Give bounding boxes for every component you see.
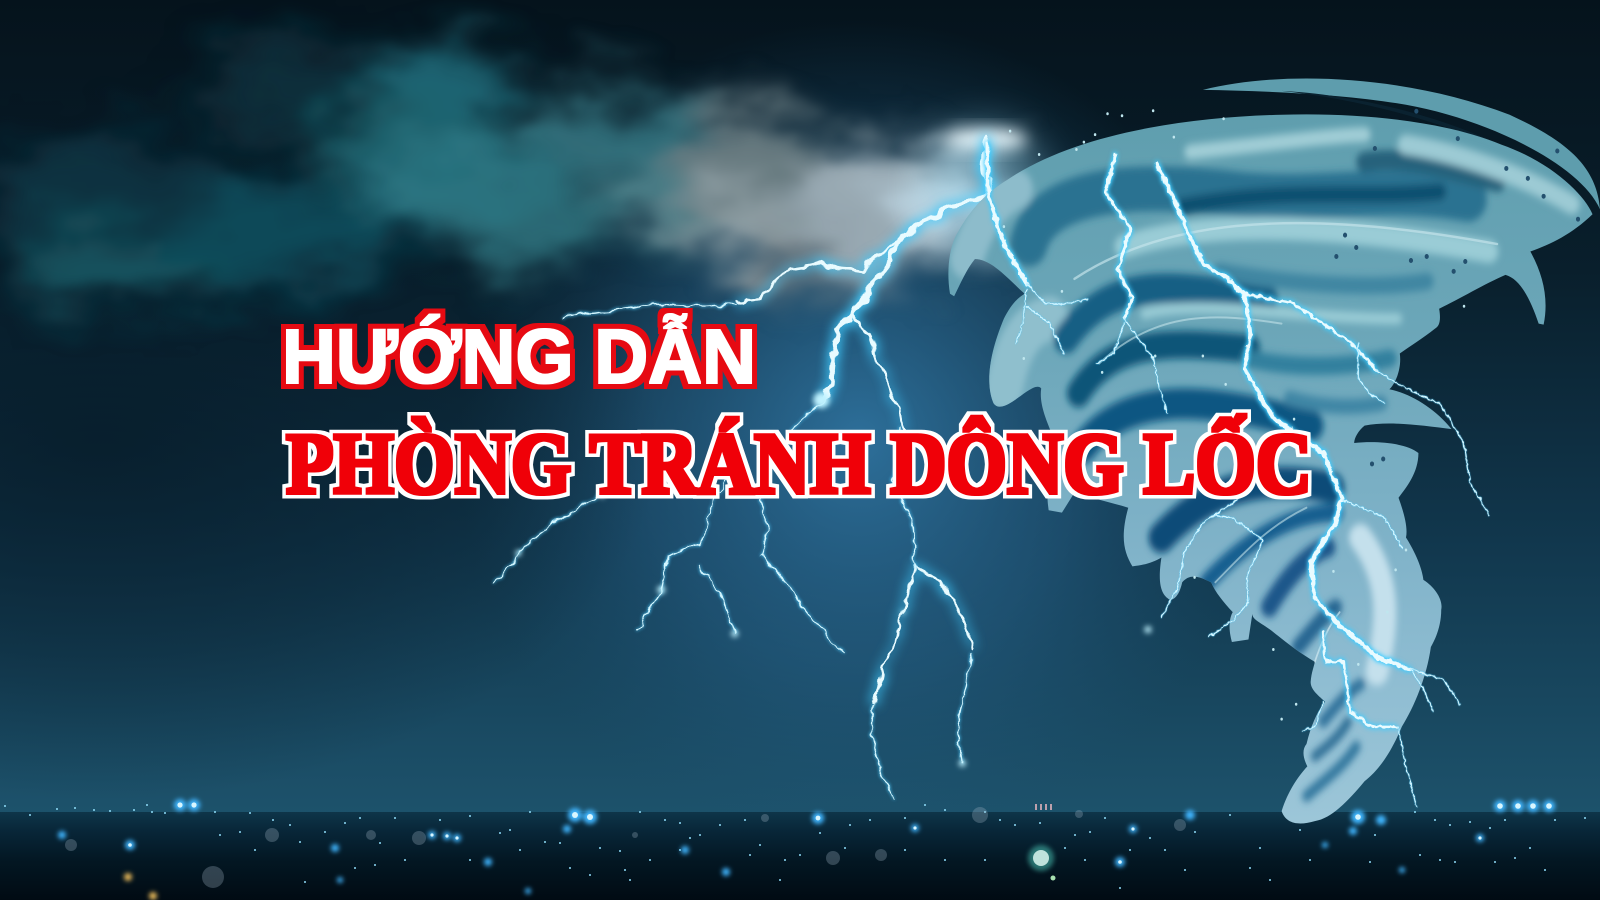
lightning bolts over the sky [495, 138, 1152, 801]
bright light cores [128, 802, 1552, 864]
pink distant lights [1036, 804, 1051, 810]
funnel shading bands [967, 135, 1572, 796]
thin bolts [495, 304, 972, 801]
city ground with lights [0, 799, 1600, 900]
lightning on tornado [987, 145, 1489, 806]
upper swoosh [1203, 78, 1600, 209]
storm clouds [0, 43, 1005, 305]
lightning nodes [515, 392, 1152, 767]
tornado [948, 78, 1600, 824]
bokeh spots [65, 807, 1186, 888]
funnel motes [1004, 111, 1464, 719]
title line 1: HƯỚNG DẪN [282, 313, 756, 400]
warm lights [124, 873, 157, 900]
blurred glow of bright lights [58, 799, 1555, 894]
teal-white bright spot [1028, 845, 1056, 880]
main bolt [737, 138, 990, 704]
distant tiny lights [5, 805, 1585, 888]
title line 2: PHÒNG TRÁNH DÔNG LỐC [286, 413, 1312, 513]
lightning source flash [925, 125, 1045, 245]
particles on funnel [1336, 111, 1578, 464]
thin tornado bolts [1016, 284, 1489, 806]
thick tornado bolts [987, 145, 1410, 727]
title: two lines [282, 313, 1312, 513]
funnel body [948, 114, 1593, 824]
